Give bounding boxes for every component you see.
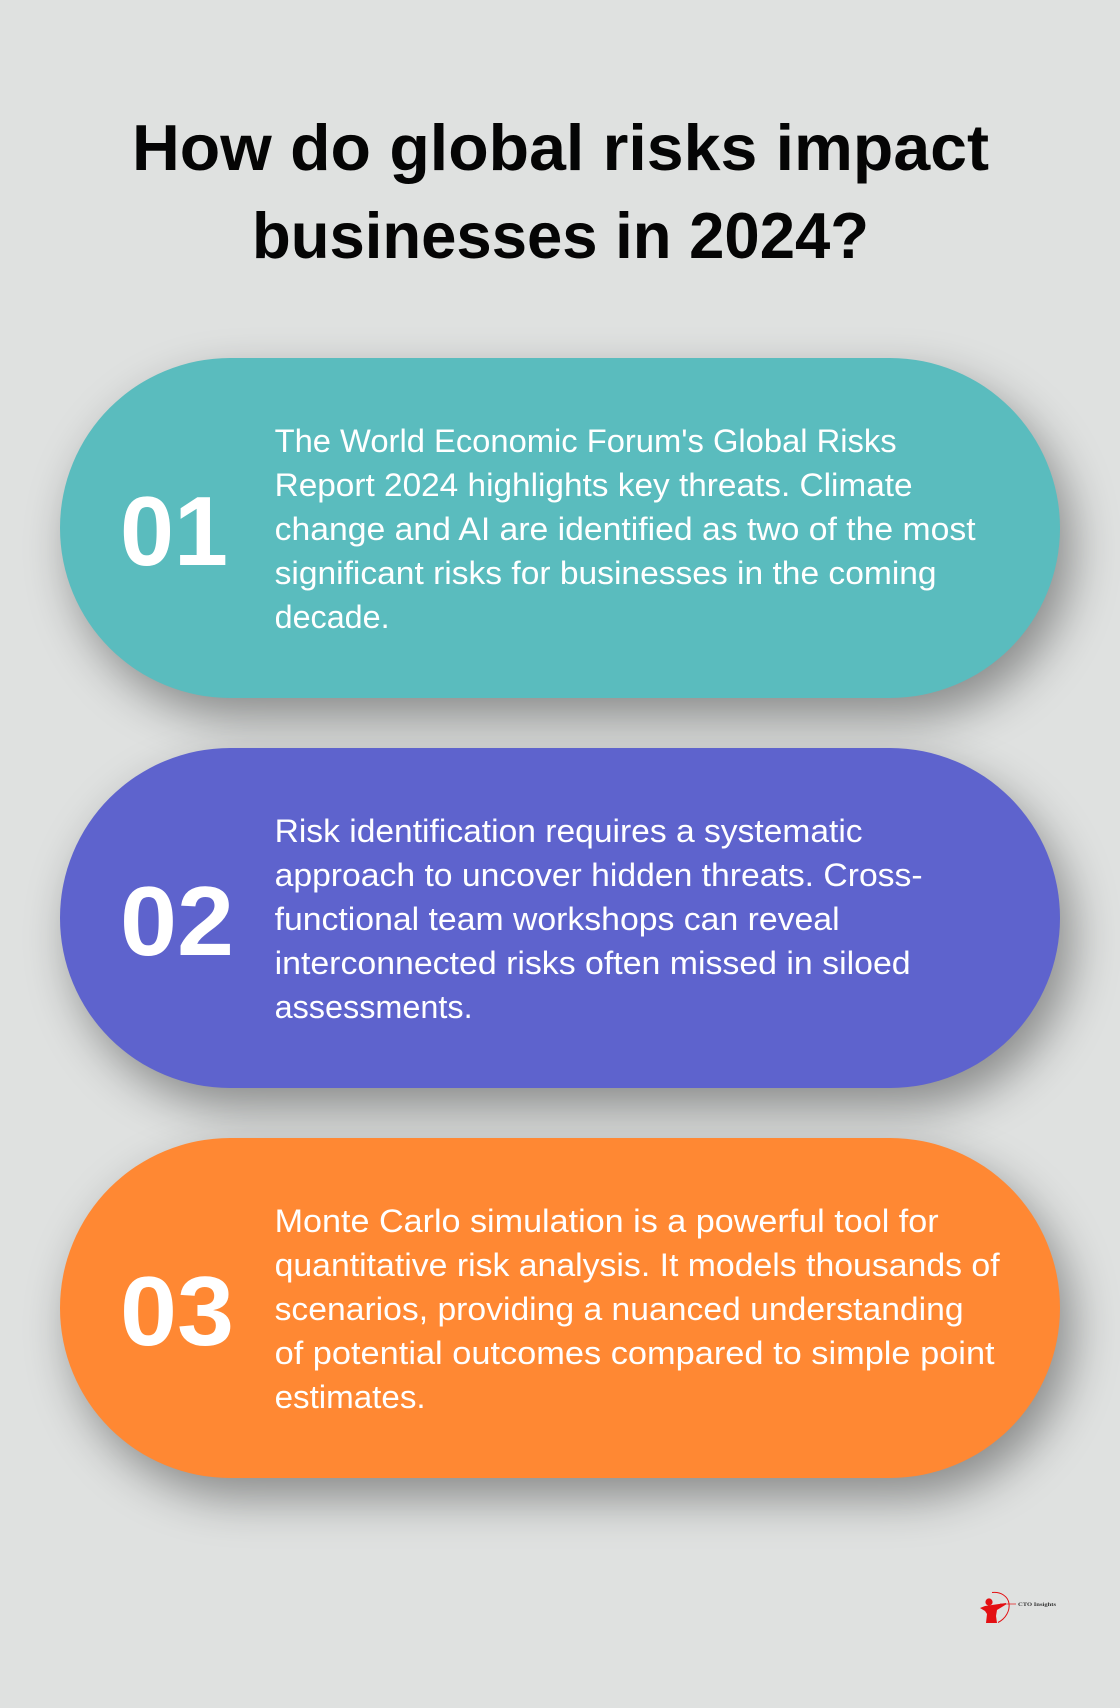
text: step 02 description: approach to uncover hidden threats. Cross- bbox=[275, 857, 923, 893]
text: step 03 description: Monte Carlo simulation is a powerful tool for bbox=[275, 1203, 939, 1239]
number 01: 01 bbox=[120, 476, 228, 586]
text: step 02 description bbox=[275, 813, 923, 1025]
logo wordmark: CTO Insights bbox=[1018, 1602, 1057, 1608]
text: step 01 description: significant risks for businesses in the coming bbox=[275, 555, 937, 591]
text: step 03 description: quantitative risk analysis. It models thousands of bbox=[275, 1247, 1000, 1283]
text: step 01 description: Report 2024 highlights key threats. Climate bbox=[275, 467, 913, 503]
text: step 01 description: change and AI are identified as two of the most bbox=[275, 511, 976, 547]
number 02: 02 bbox=[120, 866, 234, 976]
text: step 02 description: assessments. bbox=[275, 989, 473, 1025]
text: step 02 description: interconnected risks often missed in siloed bbox=[275, 945, 911, 981]
icon: archer bbox=[980, 1592, 1016, 1623]
title bbox=[132, 111, 989, 272]
panel: step 02 bbox=[60, 748, 1060, 1088]
panel: step 03 bbox=[60, 1138, 1060, 1478]
text: step 01 description: decade. bbox=[275, 599, 390, 635]
text: step 02 description: functional team workshops can reveal bbox=[275, 901, 840, 937]
text: step 03 description bbox=[275, 1203, 1000, 1415]
panel: step 01 bbox=[60, 358, 1060, 698]
text: step 03 description: of potential outcomes compared to simple point bbox=[275, 1335, 995, 1371]
number 03: 03 bbox=[120, 1256, 234, 1366]
text: step 03 description: estimates. bbox=[275, 1379, 426, 1415]
text: step 03 description: scenarios, providing a nuanced understanding bbox=[275, 1291, 964, 1327]
title: businesses in 2024? bbox=[252, 199, 869, 272]
logo: CTO Insights archer bbox=[980, 1592, 1057, 1623]
title: How do global risks impact bbox=[132, 111, 989, 184]
text: step 02 description: Risk identification requires a systematic bbox=[275, 813, 863, 849]
text: step 01 description: The World Economic Forum's Global Risks bbox=[275, 423, 897, 459]
text: step 01 description bbox=[275, 423, 976, 635]
